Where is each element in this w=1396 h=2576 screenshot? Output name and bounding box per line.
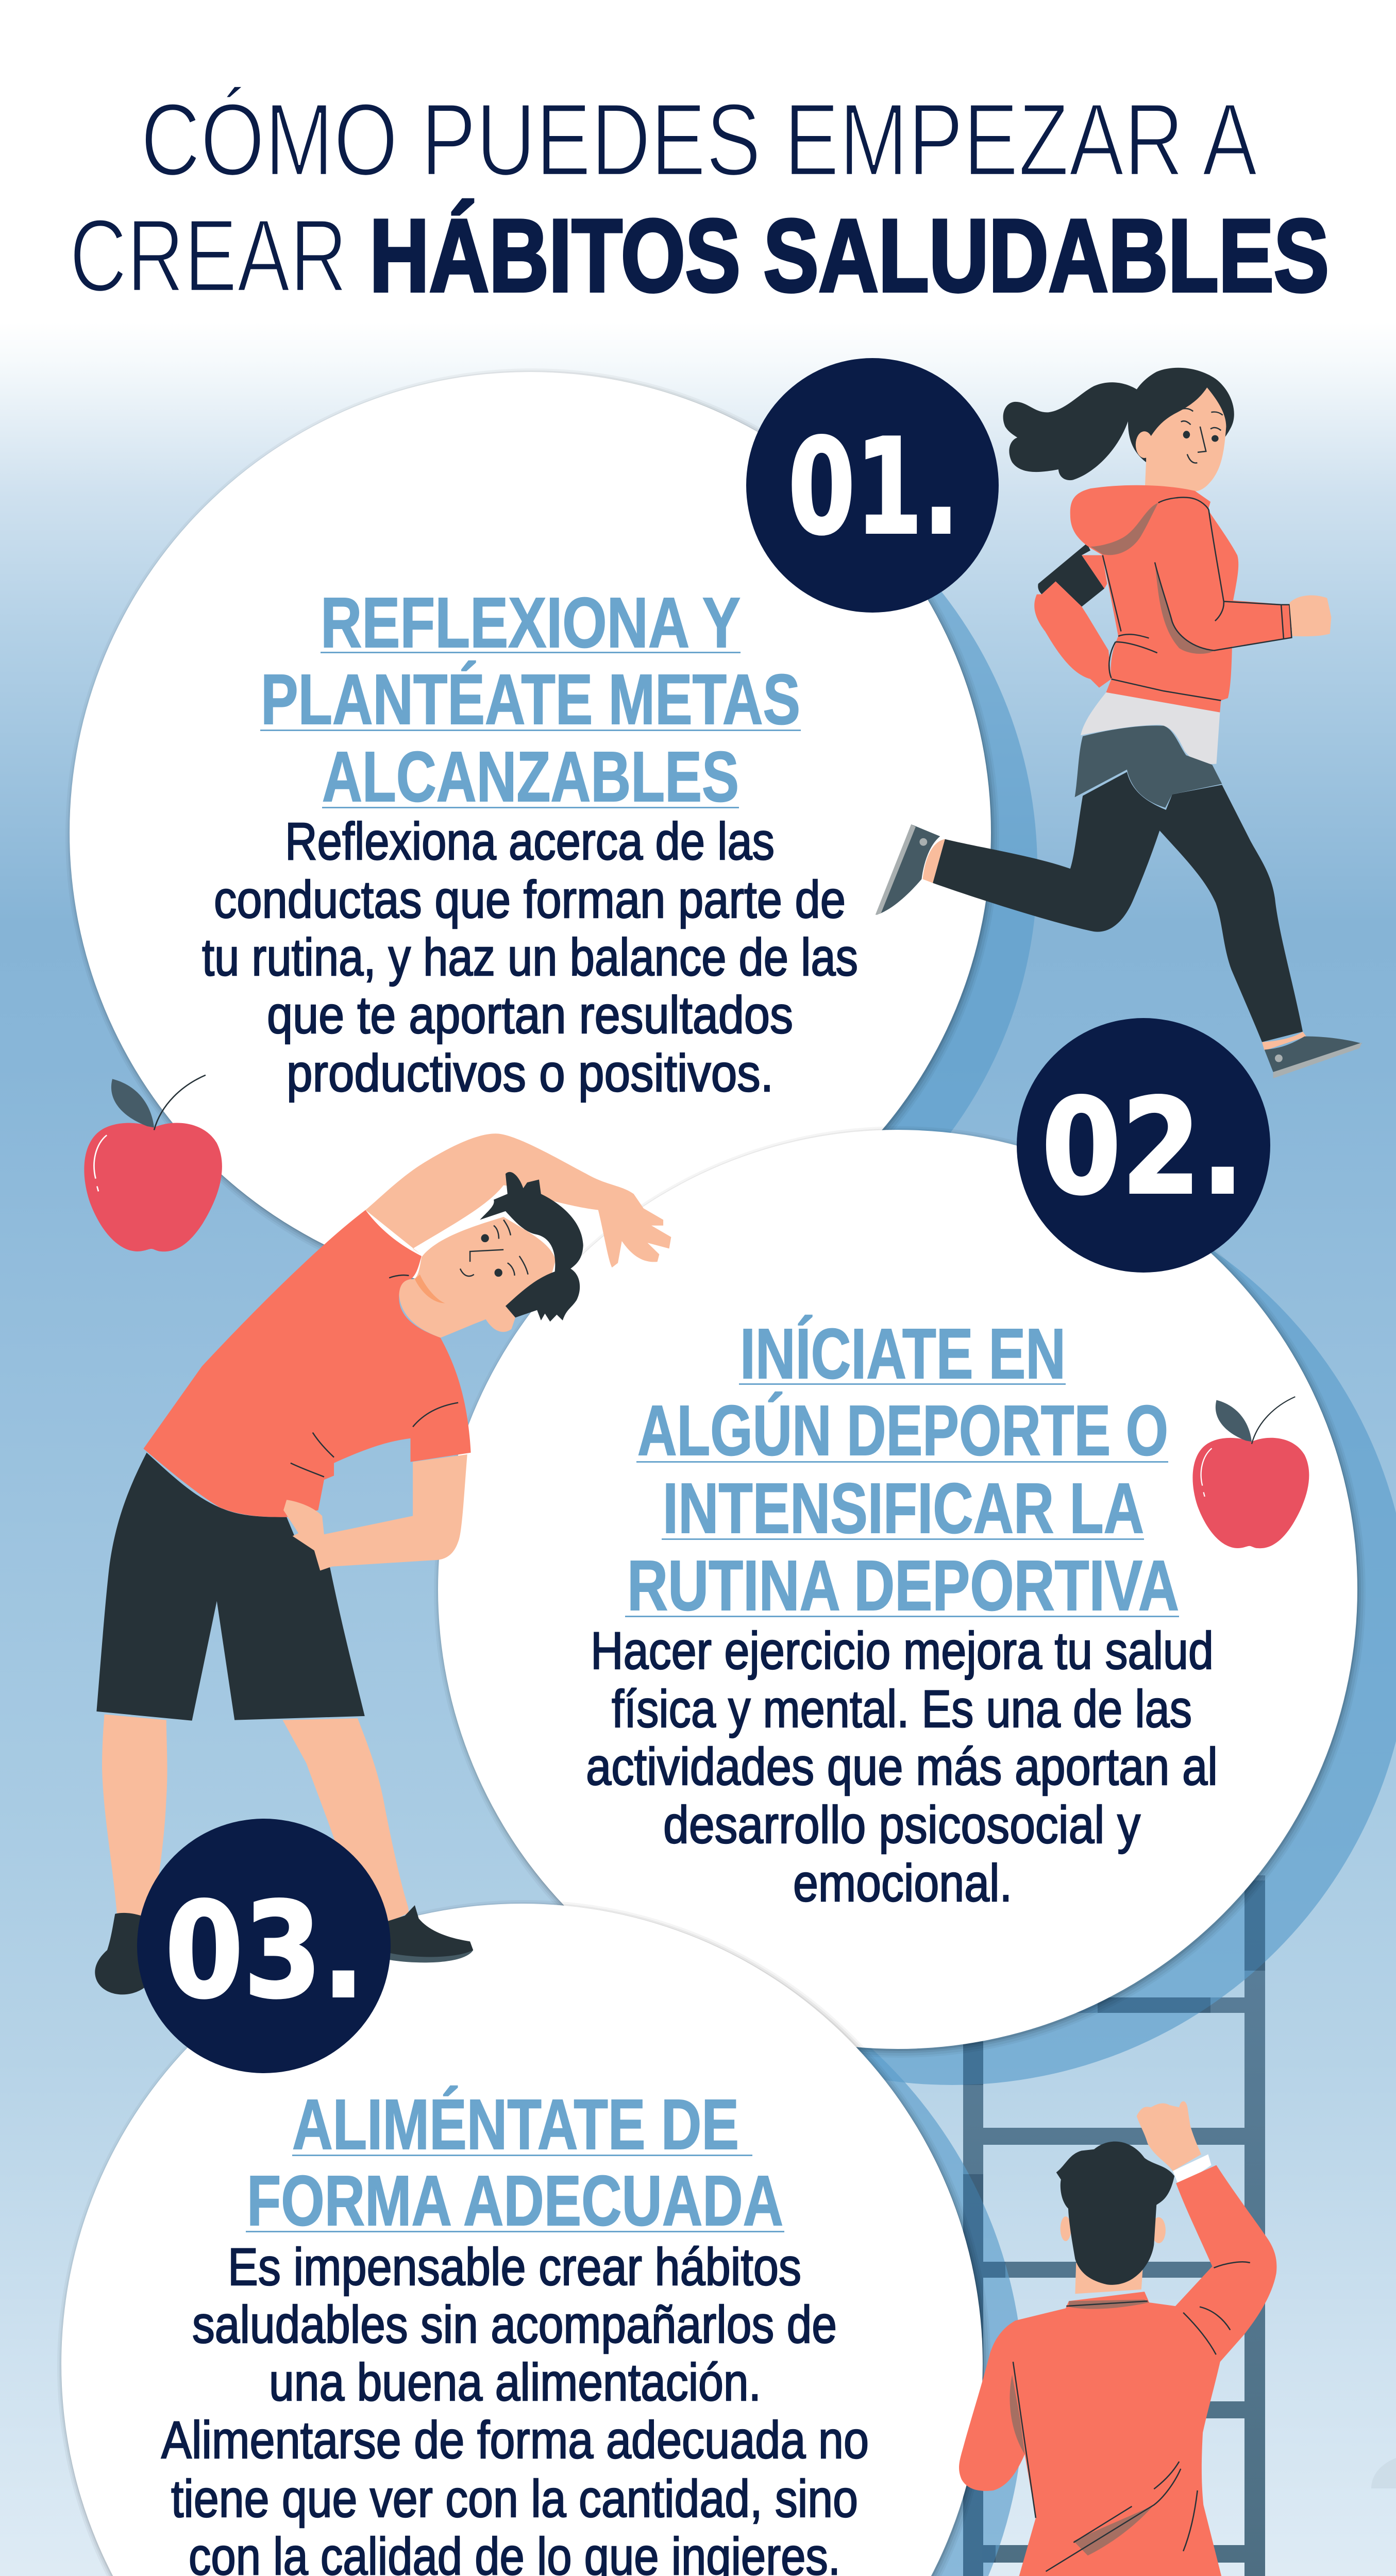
badge 03: 03. <box>165 1874 365 2028</box>
title <box>70 82 1329 313</box>
step 2 heading <box>625 1314 1179 1625</box>
step 2 heading: INÍCIATE EN <box>740 1314 1066 1394</box>
circle 1 soft shadow <box>65 368 999 1302</box>
step 1 body text: conductas que forman parte de <box>214 870 846 929</box>
icon: apple left <box>84 1075 222 1251</box>
badge 03 <box>137 1819 391 2073</box>
panel: step 3 <box>57 1900 991 2576</box>
step 1 body text: Reflexiona acerca de las <box>285 812 775 871</box>
illustration: man climbing ladder <box>959 2101 1276 2576</box>
white circle 1 <box>70 372 991 1293</box>
badge 02 <box>1017 1018 1270 1273</box>
badge 01 <box>746 358 999 613</box>
title: CREAR <box>70 198 347 313</box>
step 1 body text: que te aportan resultados <box>267 986 793 1044</box>
step 3 heading: FORMA ADECUADA <box>247 2161 783 2241</box>
step 2 heading: RUTINA DEPORTIVA <box>627 1546 1179 1625</box>
white circle 3 <box>61 1904 983 2576</box>
illustration: woman running <box>876 368 1362 1078</box>
step 2 body text: Hacer ejercicio mejora tu salud <box>591 1621 1214 1680</box>
white circle 2 <box>438 1130 1357 2049</box>
step 1 body text <box>202 812 858 1103</box>
clouds <box>436 2458 1396 2576</box>
step 3 body text: saludables sin acompañarlos de <box>192 2295 837 2354</box>
circle 2 soft shadow <box>434 1126 1366 2058</box>
step 2 heading: ALGÚN DEPORTE O <box>637 1391 1168 1470</box>
step 3 body text: Es impensable crear hábitos <box>228 2238 801 2296</box>
panel: step 1 <box>65 368 999 1302</box>
step 1 body text: productivos o positivos. <box>287 1044 773 1103</box>
ladder <box>963 1880 1265 2576</box>
step 3 body text <box>161 2238 869 2576</box>
icon: apple in step 2 <box>1192 1397 1309 1548</box>
step 1 heading <box>260 583 801 817</box>
blue crescents behind circles <box>144 421 1396 2576</box>
step 2 body text: emocional. <box>793 1854 1012 1912</box>
illustration: man stretching <box>95 1133 671 1994</box>
step 2 body text: desarrollo psicosocial y <box>663 1795 1140 1854</box>
badge 01: 01. <box>788 411 960 564</box>
step 2 body text <box>586 1621 1218 1912</box>
step 3 body text: una buena alimentación. <box>269 2353 761 2412</box>
panel: step 2 <box>434 1126 1366 2058</box>
step 3 body text: tiene que ver con la cantidad, sino <box>171 2469 858 2528</box>
step 1 heading: ALCANZABLES <box>322 737 739 817</box>
step 2 heading: INTENSIFICAR LA <box>663 1469 1144 1548</box>
step 1 body text: tu rutina, y haz un balance de las <box>202 928 858 987</box>
step 1 heading: REFLEXIONA Y <box>321 583 741 663</box>
step 1 heading: PLANTÉATE METAS <box>261 660 800 739</box>
step 3 heading <box>246 2085 784 2241</box>
step 3 body text: Alimentarse de forma adecuada no <box>161 2411 869 2469</box>
step 2 body text: física y mental. Es una de las <box>612 1680 1192 1738</box>
step 2 body text: actividades que más aportan al <box>586 1737 1218 1796</box>
badge 02: 02. <box>1041 1071 1244 1224</box>
step 3 heading: ALIMÉNTATE DE <box>292 2085 739 2164</box>
circle 3 soft shadow <box>57 1900 991 2576</box>
